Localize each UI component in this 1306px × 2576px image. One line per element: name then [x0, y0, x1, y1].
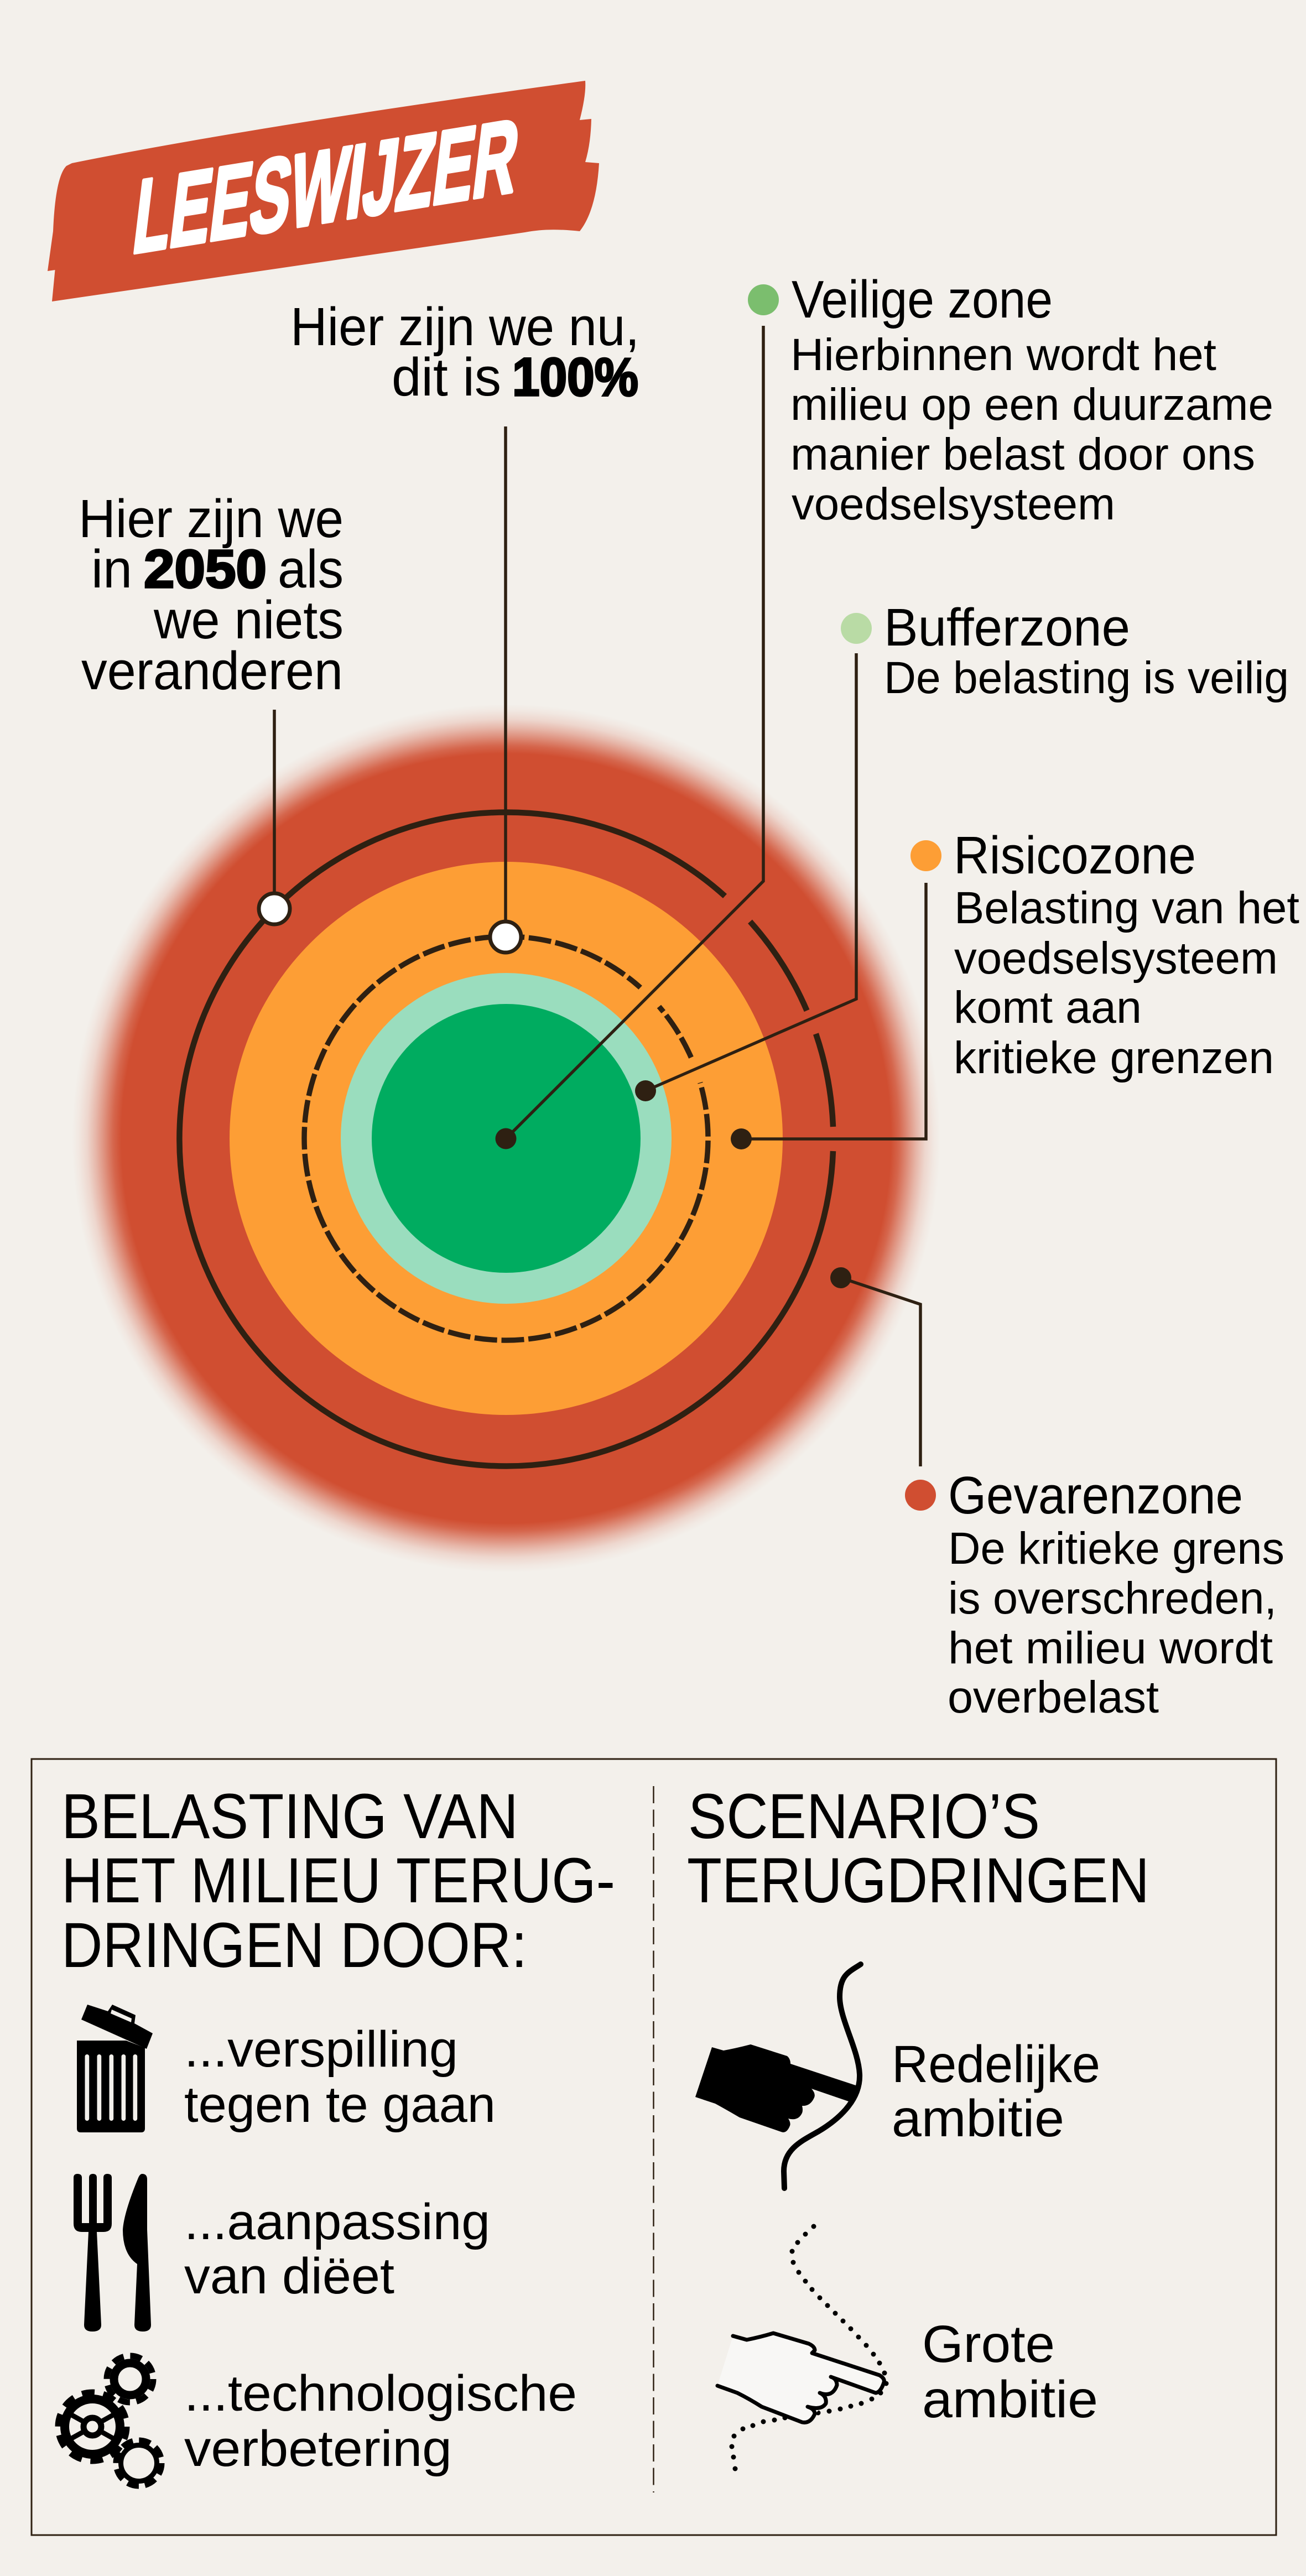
legend: gevarenzone: is overschreden,: [948, 1573, 1277, 1623]
text: technologische verbetering: verbetering: [184, 2421, 452, 2477]
legend: risicozone: Belasting van het: [954, 883, 1299, 933]
legend: gevarenzone: [905, 1466, 1284, 1722]
callout: hier zijn we in 2050: 2050: [144, 539, 267, 599]
leader: gevarenzone: [830, 1267, 920, 1466]
callout: hier zijn we in 2050: als: [278, 539, 344, 599]
legend dot green: [748, 284, 779, 315]
heading: belasting van het milieu terugdringen door: BELASTING VAN: [61, 1781, 518, 1852]
dashed divider: [653, 1786, 654, 2492]
heading: belasting van het milieu terugdringen door: HET MILIEU TERUG-: [61, 1845, 615, 1916]
concentric zone diagram: [72, 704, 940, 1573]
icon: trash bin: [77, 2005, 153, 2132]
legend: risicozone: komt aan: [954, 982, 1142, 1033]
legend: bufferzone: De belasting is veilig: [884, 653, 1289, 703]
buffer zone: [341, 973, 672, 1304]
legend: veilige zone: milieu op een duurzame: [790, 379, 1273, 430]
icon: black hand on solid curve: [695, 1964, 861, 2188]
legend: veilige zone: [748, 270, 1273, 529]
legend: gevarenzone: overbelast: [948, 1672, 1159, 1722]
solid curve: [784, 1964, 861, 2188]
legend: veilige zone: Veilige zone: [792, 270, 1053, 329]
text: grote ambitie: [922, 2315, 1098, 2429]
solid ring: 2050 level: [179, 813, 833, 1466]
legend: gevarenzone: het milieu wordt: [948, 1623, 1273, 1673]
dashed ring: current level 100%: [304, 936, 708, 1340]
safe zone: [372, 1004, 641, 1273]
text: grote ambitie: Grote: [922, 2315, 1055, 2374]
legend: veilige zone: manier belast door ons: [790, 429, 1255, 480]
text: redelijke ambitie: ambitie: [892, 2089, 1064, 2148]
callout: hier zijn we in 2050: veranderen: [81, 641, 343, 701]
legend: risicozone: [910, 826, 1299, 1083]
callout: hier zijn we nu: 100%: [512, 347, 638, 407]
callout: hier zijn we in 2050: [79, 488, 344, 701]
heading: scenario's terugdringen: [687, 1781, 1149, 1916]
text: verspilling tegen te gaan: ...verspilling: [184, 2021, 458, 2078]
leader: Hier zijn we in 2050: [259, 710, 290, 924]
legend: veilige zone: voedselsysteem: [792, 479, 1115, 529]
text: redelijke ambitie: [892, 2035, 1100, 2148]
text: redelijke ambitie: Redelijke: [892, 2035, 1100, 2094]
legend: bufferzone: Bufferzone: [884, 598, 1130, 657]
leader: Hier zijn we nu: [490, 426, 521, 953]
text: grote ambitie: ambitie: [922, 2370, 1098, 2429]
heading: belasting van het milieu terugdringen door: [61, 1781, 615, 1981]
bottom gear: [116, 2440, 162, 2486]
legend dot light green: [841, 613, 872, 644]
callout: hier zijn we nu: dit is: [392, 347, 501, 407]
dotted curve: [729, 2224, 888, 2471]
legend dot orange: [910, 840, 941, 871]
icon: gears: [58, 2356, 162, 2486]
legend: veilige zone: Hierbinnen wordt het: [790, 330, 1216, 380]
text: technologische verbetering: ...technologische: [184, 2365, 577, 2422]
large gear: [58, 2392, 127, 2461]
danger zone with blurred edge: [72, 704, 940, 1573]
callout: hier zijn we nu: Hier zijn we nu,: [290, 296, 639, 357]
text: verspilling tegen te gaan: [184, 2021, 496, 2133]
legend: gevarenzone: De kritieke grens: [948, 1523, 1284, 1574]
legend: gevarenzone: Gevarenzone: [948, 1466, 1243, 1525]
heading: scenario's terugdringen: SCENARIO’S: [688, 1781, 1040, 1852]
icon: fork and knife: [74, 2174, 151, 2332]
title text: LEESWIJZER: [128, 97, 525, 276]
legend: bufferzone: [841, 598, 1289, 703]
title banner: Leeswijzer: [48, 81, 599, 301]
panel: belasting terugdringen frame: [32, 1759, 1276, 2535]
outlined pointing hand: [717, 2333, 884, 2423]
leader: veilige zone: [496, 326, 763, 1149]
legend dot red: [905, 1480, 936, 1511]
callout: hier zijn we in 2050: we niets: [153, 590, 344, 650]
banner brush shape: [48, 81, 599, 301]
callout: hier zijn we in 2050: Hier zijn we: [79, 488, 344, 549]
callout: hier zijn we nu: [290, 296, 639, 407]
leader: risicozone: [731, 883, 926, 1149]
heading: belasting van het milieu terugdringen door: DRINGEN DOOR:: [61, 1910, 527, 1981]
icon: white hand on dotted curve: [717, 2224, 888, 2471]
text: aanpassing van dieet: [184, 2194, 490, 2304]
text: technologische verbetering: [184, 2365, 577, 2477]
legend: risicozone: Risicozone: [954, 826, 1196, 885]
legend: risicozone: kritieke grenzen: [954, 1033, 1274, 1083]
text: aanpassing van dieet: van diëet: [184, 2248, 394, 2304]
text: aanpassing van dieet: ...aanpassing: [184, 2194, 490, 2250]
heading: scenario's terugdringen: TERUGDRINGEN: [687, 1845, 1149, 1916]
leader: bufferzone: [635, 653, 856, 1101]
text: verspilling tegen te gaan: tegen te gaan: [184, 2077, 496, 2133]
risk zone: [230, 862, 783, 1415]
top gear: [107, 2356, 153, 2402]
black pointing hand: [695, 2044, 857, 2132]
legend: risicozone: voedselsysteem: [954, 933, 1278, 983]
callout: hier zijn we in 2050: in: [91, 539, 132, 599]
